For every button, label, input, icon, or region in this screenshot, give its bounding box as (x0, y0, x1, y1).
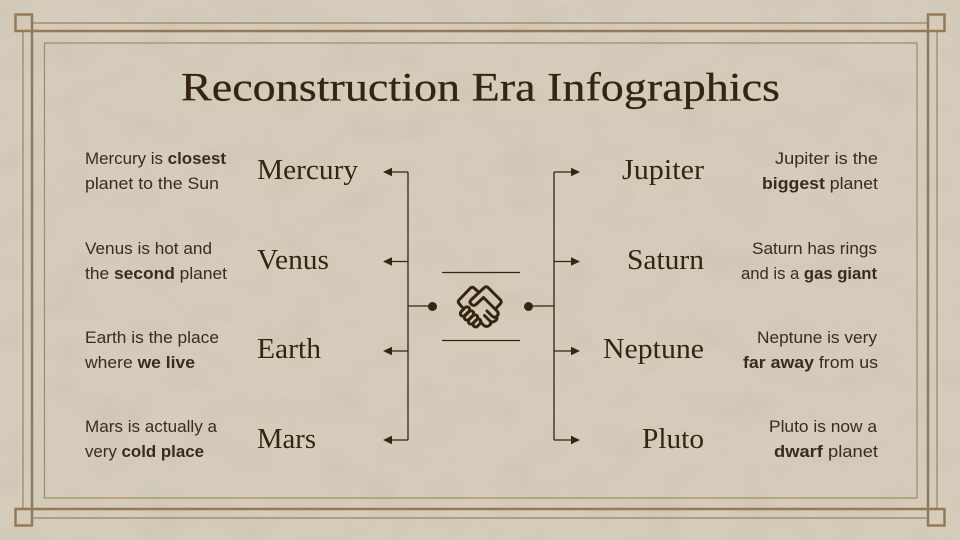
Pluto description: Pluto is now a (769, 418, 878, 436)
Mars description: very cold place (85, 443, 202, 461)
right column: outer planets (603, 150, 878, 461)
Earth label: Earth (257, 333, 321, 365)
Pluto description: dwarf planet (774, 443, 872, 461)
Venus description: the second planet (85, 265, 224, 283)
Saturn label: Saturn (627, 244, 705, 276)
right bracket arrows (524, 168, 580, 444)
Mercury description: planet to the Sun (85, 175, 219, 193)
title: Reconstruction Era Infographics (181, 64, 780, 110)
icon: handshake (458, 287, 501, 328)
Saturn description: Saturn has rings (752, 240, 877, 258)
Venus description: Venus is hot and (85, 240, 212, 258)
Jupiter description: biggest planet (762, 175, 874, 193)
Neptune description: Neptune is very (757, 329, 878, 347)
Earth description: where we live (85, 354, 192, 372)
center rule lines (442, 272, 520, 340)
Jupiter label: Jupiter (622, 154, 704, 186)
Mercury label: Mercury (257, 154, 359, 186)
left bracket arrows (383, 168, 437, 444)
Mars label: Mars (257, 423, 316, 455)
Saturn description: and is a gas giant (741, 265, 876, 283)
left column: inner planets (84, 150, 359, 461)
Pluto label: Pluto (642, 423, 704, 455)
Neptune description: far away from us (743, 354, 874, 372)
Jupiter description: Jupiter is the (775, 150, 878, 168)
Neptune label: Neptune (603, 333, 704, 365)
Venus label: Venus (257, 244, 329, 276)
Mercury description: Mercury is closest (85, 150, 225, 168)
Earth description: Earth is the place (85, 329, 219, 347)
Mars description: Mars is actually a (85, 418, 218, 436)
